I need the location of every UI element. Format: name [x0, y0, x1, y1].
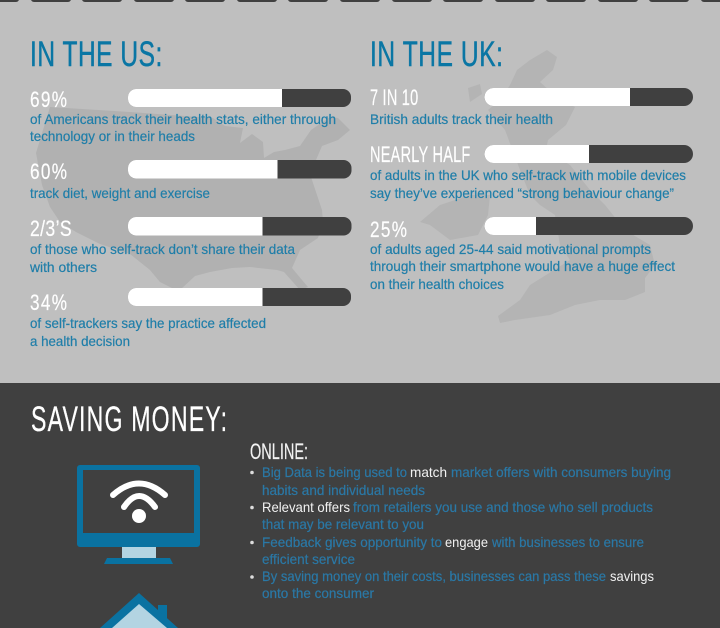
stat: 69%: technology or in their heads — [30, 128, 195, 144]
stat: two thirds: 2/3’S — [30, 217, 72, 242]
stat: 34% — [30, 288, 351, 349]
stat: 69%: of Americans track their health stats, either through — [30, 111, 336, 127]
stat: 60%: 60% — [30, 160, 67, 185]
panel: saving money — [0, 383, 720, 628]
bullet list: online: from retailers you use and those who sell products — [353, 499, 653, 515]
stat: 25%: through their smartphone would have a huge effect — [370, 258, 675, 274]
bullet list: online: Relevant offers — [262, 499, 350, 515]
bullet list: online: with businesses to ensure — [491, 534, 644, 550]
bullet list: online: match — [410, 464, 447, 480]
stat: two thirds: of those who self-track don’t share their data — [30, 241, 295, 257]
icon: monitor with wifi — [77, 465, 200, 564]
heading: In the UK: IN THE UK: — [370, 36, 503, 74]
stat: nearly half: of adults in the UK who self-track with mobile devices — [370, 167, 686, 183]
bullet list: online: market offers with consumers buying — [451, 464, 671, 480]
bullet list: online: Feedback gives opportunity to — [262, 534, 442, 550]
stat: 25%: 25% — [370, 218, 407, 243]
stat: 60%: track diet, weight and exercise — [30, 185, 210, 201]
map: United States — [36, 107, 350, 290]
stat: two thirds — [29, 217, 352, 275]
bullet list: online — [250, 464, 671, 601]
stat: 34%: 34% — [30, 291, 67, 316]
stat: 7 in 10: 7 IN 10 — [370, 85, 418, 110]
top dashed border — [0, 0, 720, 2]
bullet list: online: savings — [610, 568, 654, 584]
bullet list: online: engage — [445, 534, 488, 550]
stat: 25%: on their health choices — [370, 276, 504, 292]
bullet list: online: Big Data is being used to — [262, 464, 407, 480]
stat: nearly half: NEARLY HALF — [370, 142, 470, 167]
bullet list: online: that may be relevant to you — [262, 516, 424, 532]
bullet list: online: efficient service — [262, 551, 355, 567]
map: United Kingdom — [420, 50, 655, 323]
stat: nearly half — [370, 142, 693, 201]
heading: saving money: SAVING MONEY: — [31, 400, 227, 439]
stat: 25% — [370, 217, 693, 292]
heading: In the US: IN THE US: — [30, 36, 162, 74]
bullet list: online: By saving money on their costs, businesses can pass these — [262, 568, 606, 584]
stat: 34%: of self-trackers say the practice affected — [30, 315, 266, 331]
stat: 60% — [30, 160, 352, 201]
icon: house — [100, 593, 178, 628]
stat: nearly half: say they’ve experienced “strong behaviour change” — [370, 185, 674, 201]
stat: 69% — [30, 88, 351, 144]
stat: 34%: a health decision — [30, 333, 130, 349]
stat: 25%: of adults aged 25-44 said motivational prompts — [370, 241, 651, 257]
bullet list: online: habits and individual needs — [262, 482, 425, 498]
stat: 7 in 10: British adults track their health — [370, 111, 553, 127]
stat: 7 in 10 — [370, 85, 693, 127]
subheading: online: ONLINE: — [250, 439, 308, 464]
bullet list: online: onto the consumer — [262, 585, 374, 601]
stat: two thirds: with others — [29, 259, 97, 275]
stat: 69%: 69% — [30, 88, 67, 113]
